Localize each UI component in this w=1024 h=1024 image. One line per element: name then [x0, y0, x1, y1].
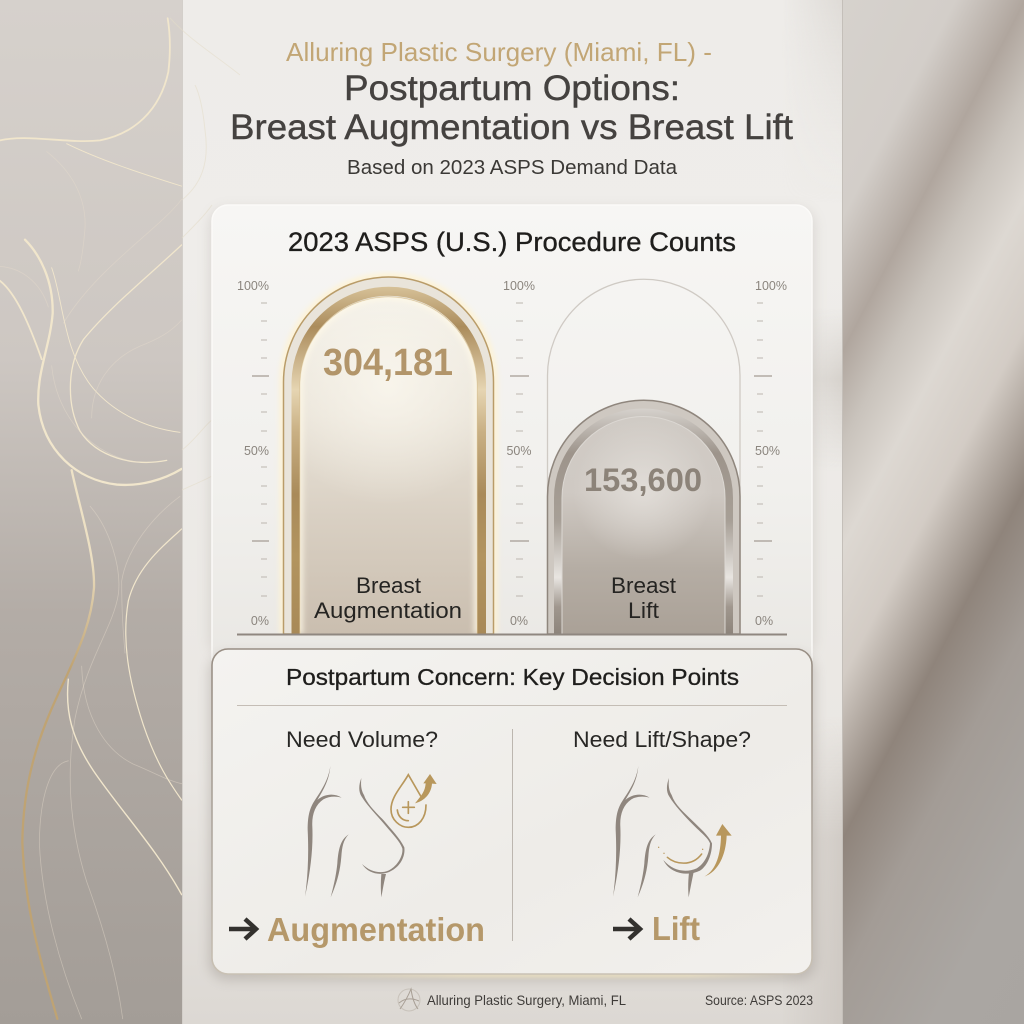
left percentage scale: 50%: [244, 444, 269, 458]
header titles: [230, 37, 793, 179]
panel: key decision points: [209, 649, 815, 980]
left percentage scale: [237, 279, 269, 628]
left background with gold flowing lines: [0, 0, 182, 1024]
value: 304,181: 304,181: [323, 342, 453, 384]
chart heading: 2023 ASPS (U.S.) Procedure Counts: [288, 227, 736, 257]
right percentage scale: 0%: [755, 614, 773, 628]
right percentage scale: [754, 279, 787, 628]
icon: torso with volume drop: [305, 766, 437, 897]
middle percentage scale: 100%: [503, 279, 535, 293]
middle percentage scale: 0%: [510, 614, 528, 628]
question: need lift or shape: Need Lift/Shape?: [573, 727, 751, 752]
panel heading: Postpartum Concern: Key Decision Points: [286, 664, 739, 690]
footer: practice name: Alluring Plastic Surgery, Miami, FL: [427, 992, 626, 1008]
chart baseline: [237, 634, 787, 636]
label: breast lift: Breast: [611, 573, 676, 598]
right background draped fabric: [843, 0, 1024, 1024]
silver arch bar: breast lift: [548, 400, 740, 634]
question: need volume: Need Volume?: [286, 727, 438, 752]
central panel background: [170, 0, 843, 1024]
label: breast augmentation: Augmentation: [314, 598, 462, 623]
middle percentage scale: [503, 279, 535, 628]
header titles: Alluring Plastic Surgery (Miami, FL) -: [286, 37, 712, 67]
right percentage scale: 50%: [755, 444, 780, 458]
value: 153,600: 153,600: [584, 462, 702, 498]
panel: procedure counts: [209, 205, 815, 675]
footer: source: Source: ASPS 2023: [705, 992, 813, 1008]
result: augmentation: Augmentation: [267, 911, 485, 948]
icon: practice logo: [398, 989, 420, 1011]
gold arch bar: breast augmentation: [284, 277, 494, 634]
result: lift: Lift: [652, 910, 700, 947]
header titles: Breast Augmentation vs Breast Lift: [230, 108, 793, 147]
middle percentage scale: 50%: [506, 444, 532, 458]
label: breast lift: Lift: [628, 598, 659, 623]
label: breast augmentation: [314, 573, 462, 623]
footer: [398, 989, 813, 1011]
left percentage scale: 100%: [237, 279, 269, 293]
label: breast augmentation: Breast: [356, 573, 421, 598]
header titles: Postpartum Options:: [344, 69, 680, 108]
result: lift: [613, 910, 700, 947]
header titles: Based on 2023 ASPS Demand Data: [347, 157, 678, 179]
right percentage scale: 100%: [755, 279, 787, 293]
icon: torso with lift arrow: [613, 766, 732, 897]
arrow: to lift: [613, 919, 640, 939]
label: breast lift: [611, 573, 676, 623]
outlined 100% arch behind lift bar: [548, 279, 740, 634]
arrow: to augmentation: [229, 919, 256, 939]
left percentage scale: 0%: [251, 614, 269, 628]
